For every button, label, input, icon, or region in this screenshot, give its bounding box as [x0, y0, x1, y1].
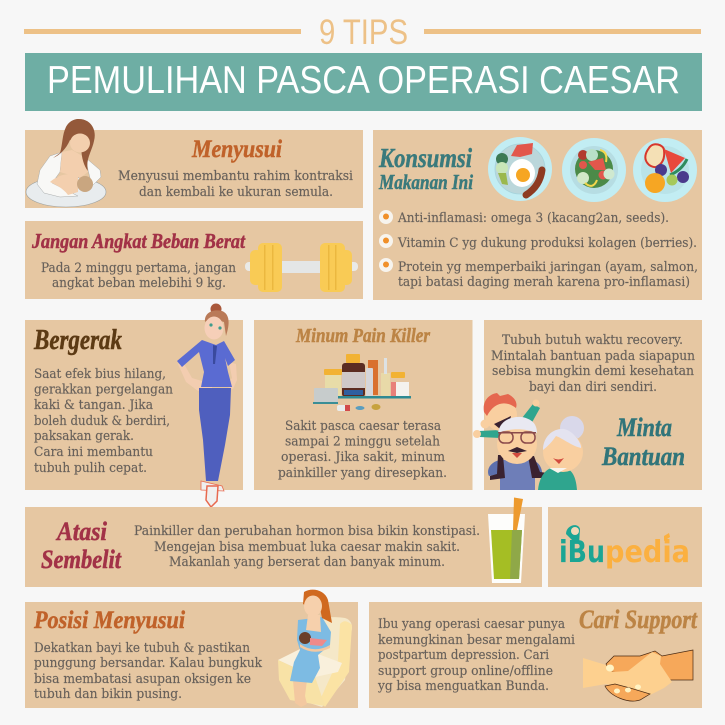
icon: mother in armchair [278, 590, 352, 707]
text block: bisa membatasi asupan oksigen ke [34, 671, 251, 686]
icon: medicines [313, 354, 411, 411]
text block: postpartum depression. Cari [378, 647, 549, 662]
text block: angkat beban melebihi 9 kg. [52, 275, 226, 290]
heading: Bergerak [33, 325, 122, 356]
heading [41, 517, 122, 574]
text block: Menyusui membantu rahim kontraksi [118, 168, 353, 183]
panel: atasi sembelit [25, 498, 542, 587]
text block: gerakkan pergelangan [34, 382, 173, 396]
panel: cari support [369, 602, 702, 708]
icon: handshake [583, 650, 693, 701]
panel: ibupedia logo [548, 507, 702, 587]
heading: Menyusui [191, 136, 282, 163]
text block: Ibu yang operasi caesar punya [378, 616, 565, 631]
heading: Jangan Angkat Beban Berat [31, 229, 246, 253]
panel: jangan angkat beban [25, 221, 363, 299]
text block: Mengejan bisa membuat luka caesar makin sakit. [154, 539, 460, 554]
panel: konsumsi makanan [373, 130, 702, 300]
text block [491, 332, 695, 394]
text block: support group online/offline [378, 663, 553, 678]
text block: kaki & tangan. Jika [34, 397, 153, 412]
icon: bullet [379, 258, 393, 272]
header: 9 tips: 9 TIPS [319, 13, 408, 52]
icon: plate fruit [633, 138, 697, 202]
text block: Tubuh butuh waktu recovery. [502, 332, 683, 347]
icon: green juice [488, 498, 525, 583]
text block: Cara ini membantu [34, 444, 153, 459]
text block: tapi batasi daging merah karena pro-inflamasi) [398, 274, 690, 289]
text block: punggung bersandar. Kalau bungkuk [34, 655, 262, 670]
text block: Vitamin C yg dukung produksi kolagen (berries). [397, 235, 697, 250]
text block: Makanlah yang berserat dan banyak minum. [169, 554, 445, 569]
text block [34, 366, 173, 475]
text block: Protein yg memperbaiki jaringan (ayam, salmon, [398, 259, 698, 274]
text block: sebisa mungkin demi kesehatan [492, 363, 694, 378]
text block: dan kembali ke ukuran semula. [139, 184, 333, 199]
text block [397, 210, 698, 289]
heading: Posisi Menyusui [33, 607, 185, 634]
text block: painkiller yang diresepkan. [278, 465, 447, 480]
text block: boleh duduk & berdiri, [34, 413, 170, 428]
text block: sampai 2 minggu setelah [285, 434, 440, 448]
panel: minum pain killer [254, 320, 472, 490]
logo [559, 525, 690, 570]
icon: plate salad [562, 138, 626, 202]
heading: Minta [616, 413, 672, 442]
heading: Atasi [55, 517, 108, 546]
logo: iBu [559, 535, 605, 570]
header: 9 tips [24, 13, 701, 52]
text block: tubuh pulih cepat. [34, 460, 147, 475]
text block: tubuh dan bikin pusing. [34, 686, 182, 701]
panel: menyusui [25, 119, 363, 208]
icon: breastfeeding mother [26, 119, 106, 207]
text block [41, 260, 236, 290]
icon: dumbbell [245, 243, 358, 292]
text block: paksakan gerak. [34, 428, 134, 443]
heading: Bantuan [601, 442, 685, 471]
panel: bergerak [25, 320, 243, 490]
text block: operasi. Jika sakit, minum [281, 449, 445, 464]
text block: Painkiller dan perubahan hormon bisa bikin konstipasi. [134, 523, 480, 538]
title banner [25, 53, 702, 111]
text block: kemungkinan besar mengalami [378, 632, 575, 647]
heading [601, 413, 685, 471]
heading: Makanan Ini [378, 170, 473, 194]
icon: grandparents and child [473, 393, 584, 490]
icon: nurse figure [177, 304, 237, 507]
text block: Pada 2 minggu pertama, jangan [41, 260, 236, 275]
heading: Minum Pain Killer [295, 325, 430, 347]
text block [377, 616, 575, 693]
heading: Sembelit [41, 545, 122, 574]
logo: pedia [605, 535, 690, 570]
panel: posisi menyusui [25, 590, 358, 708]
text block: Dekatkan bayi ke tubuh & pastikan [34, 640, 250, 655]
text block [134, 523, 480, 569]
text block [118, 168, 353, 199]
text block: Anti-inflamasi: omega 3 (kacang2an, seeds). [397, 210, 669, 225]
text block [278, 418, 447, 480]
icon: bullet [379, 210, 393, 224]
text block: Mintalah bantuan pada siapapun [491, 348, 695, 363]
icon: plate breakfast [488, 137, 552, 201]
text block: yg bisa menguatkan Bunda. [377, 678, 549, 693]
text block: Saat efek bius hilang, [34, 366, 166, 381]
heading [378, 143, 473, 194]
heading: Cari Support [579, 605, 698, 634]
text block: bayi dan diri sendiri. [529, 379, 657, 394]
text block: Sakit pasca caesar terasa [285, 418, 441, 433]
heading: Konsumsi [378, 143, 472, 173]
text block [34, 640, 262, 701]
panel: minta bantuan [484, 320, 702, 490]
icon: bullet [379, 234, 393, 248]
